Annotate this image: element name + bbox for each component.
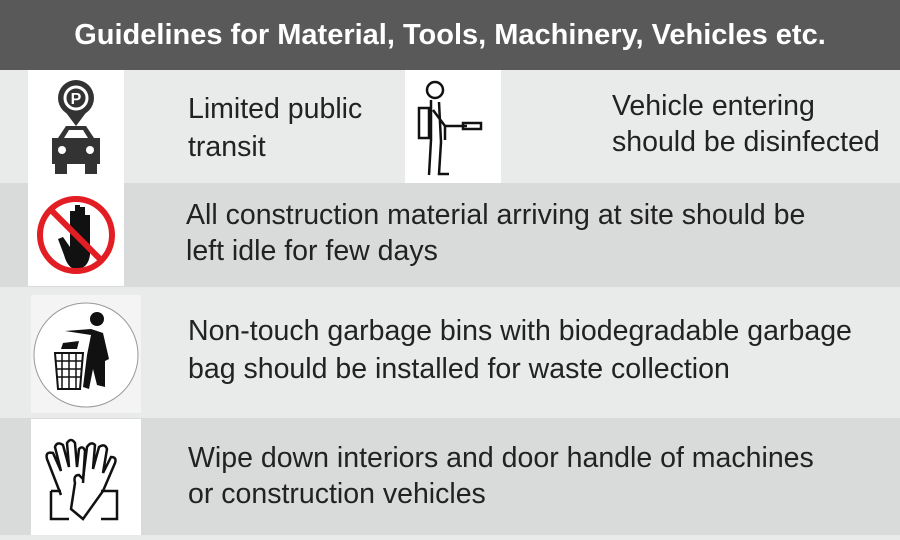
text: limited public transit: transit: [188, 131, 266, 163]
text: vehicle disinfected: Vehicle entering: [612, 90, 815, 122]
row 4: [0, 418, 900, 535]
text: construction material: [186, 199, 805, 267]
row 2: [0, 183, 900, 287]
text: wipe down: [188, 442, 814, 510]
text: vehicle disinfected: should be disinfected: [612, 126, 880, 158]
row 1: [0, 70, 900, 183]
text: construction material: left idle for few days: [186, 235, 438, 267]
text: garbage bins: [188, 315, 852, 385]
text: garbage bins: bag should be installed for waste collection: [188, 353, 730, 385]
text: limited public transit: [188, 93, 362, 163]
text: wipe down: Wipe down interiors and door handle of machines: [188, 442, 814, 474]
icon: garbage bin: [31, 295, 141, 413]
icon: car parking: P: [71, 91, 82, 108]
text: wipe down: or construction vehicles: [188, 478, 486, 510]
icon: sprayer person: [405, 70, 501, 183]
text: garbage bins: Non-touch garbage bins with biodegradable garbage: [188, 315, 852, 347]
text: construction material: All construction material arriving at site should be: [186, 199, 805, 231]
text: limited public transit: Limited public: [188, 93, 362, 125]
icon: no hand: [28, 183, 124, 286]
row 3: [0, 287, 900, 418]
text: vehicle disinfected: [612, 90, 880, 158]
icon: gloves: [31, 419, 141, 535]
icon: car parking: [28, 70, 124, 183]
title: Guidelines for Material, Tools, Machinery, Vehicles etc.: [74, 19, 826, 51]
title: [0, 0, 900, 70]
